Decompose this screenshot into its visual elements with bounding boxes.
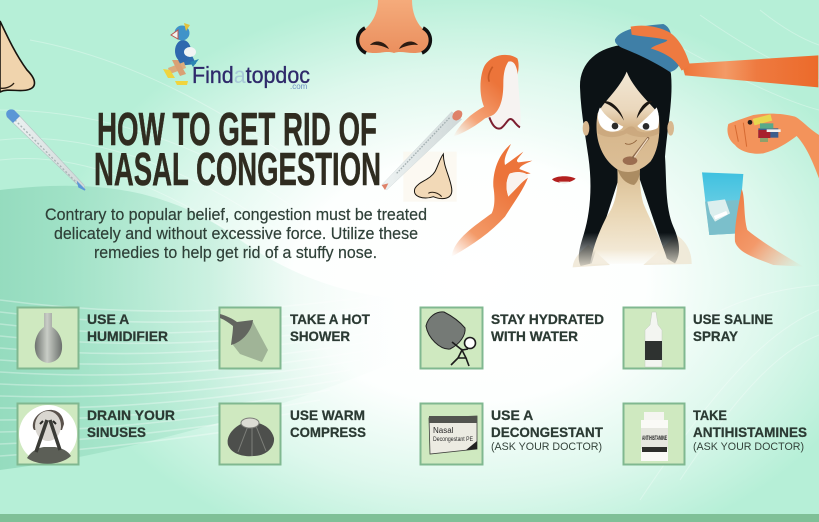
icon: saline bottle bbox=[645, 312, 662, 367]
logo wordmark: Findatopdoc bbox=[192, 62, 310, 88]
icon: duck mascot bbox=[163, 23, 199, 85]
icon: hand with pills bbox=[727, 114, 819, 178]
icon tile bbox=[220, 308, 280, 368]
label line two: WITH WATER bbox=[491, 328, 578, 344]
label: USE WARM bbox=[290, 407, 365, 423]
ears bbox=[583, 121, 589, 136]
remedy: use warm compress bbox=[220, 404, 366, 464]
logo .com: .com bbox=[290, 82, 308, 91]
remedy: use saline spray bbox=[624, 308, 773, 368]
icon: decongestant box: Decongestant PE bbox=[433, 436, 474, 443]
icon: decongestant box: Nasal bbox=[433, 426, 454, 435]
neck and chest bbox=[590, 168, 668, 264]
remedy: use a decongestant bbox=[420, 404, 603, 464]
label line two: DECONGESTANT bbox=[491, 424, 603, 440]
icon tile bbox=[18, 308, 78, 368]
icon: shower water bbox=[233, 322, 268, 362]
intro text: delicately and without excessive force. Utilize these bbox=[54, 224, 418, 243]
icon: carrying figure bbox=[451, 338, 476, 366]
nose line and mouth bbox=[625, 140, 637, 144]
intro text bbox=[45, 205, 427, 262]
label line two: SINUSES bbox=[87, 424, 146, 440]
label line two: COMPRESS bbox=[290, 424, 366, 440]
remedy: take a hot shower bbox=[220, 308, 370, 368]
icon: water jug bbox=[426, 312, 465, 349]
intro text: Contrary to popular belief, congestion must be treated bbox=[45, 205, 427, 224]
icon tile bbox=[624, 308, 684, 368]
icon: falling red drop bbox=[552, 176, 576, 184]
woman bbox=[573, 44, 692, 267]
icon: left side nose bbox=[0, 21, 34, 92]
label: USE A bbox=[491, 407, 533, 423]
icon: bottle label bbox=[645, 341, 662, 360]
icon tile bbox=[420, 404, 482, 464]
icon: ice pack with hand bbox=[615, 24, 818, 87]
remedy: use a humidifier bbox=[18, 308, 168, 368]
remedy: take antihistamines bbox=[624, 404, 807, 464]
label line two: SHOWER bbox=[290, 328, 350, 344]
icon: decongestant box bbox=[429, 416, 477, 454]
note: (ASK YOUR DOCTOR) bbox=[491, 441, 602, 453]
intro text: remedies to help get rid of a stuffy nose. bbox=[94, 243, 377, 262]
icon: antihistamine bottle: ANTIHISTAMINE bbox=[642, 436, 667, 442]
face bbox=[596, 72, 659, 172]
icon: hand pinching a drop bbox=[452, 144, 532, 257]
note: (ASK YOUR DOCTOR) bbox=[693, 441, 804, 453]
label line two: HUMIDIFIER bbox=[87, 328, 168, 344]
shoulders bbox=[573, 235, 692, 267]
label: DRAIN YOUR bbox=[87, 407, 175, 423]
label: STAY HYDRATED bbox=[491, 311, 604, 327]
label: TAKE A HOT bbox=[290, 311, 370, 327]
illustration group, drawn in 3x crop coordinates bbox=[382, 24, 819, 267]
icon tile bbox=[420, 308, 482, 368]
icon: glass of water with hand bbox=[702, 172, 803, 267]
eye shadows bbox=[597, 115, 659, 137]
brows bbox=[603, 101, 653, 121]
label: USE A bbox=[87, 311, 129, 327]
icon: hand holding tissue bbox=[453, 55, 521, 137]
label line two: SPRAY bbox=[693, 328, 739, 344]
icon: small nose with thermometer bbox=[382, 108, 464, 202]
hair bbox=[579, 44, 679, 266]
title bbox=[94, 103, 381, 195]
title: NASAL CONGESTION bbox=[94, 143, 381, 195]
icon: humidifier bbox=[35, 313, 62, 363]
icon: shower head bbox=[220, 314, 253, 345]
label line two: ANTIHISTAMINES bbox=[693, 424, 807, 440]
remedy: drain your sinuses bbox=[18, 404, 175, 464]
icon: compress bag bbox=[228, 423, 274, 456]
title: HOW TO GET RID OF bbox=[97, 103, 377, 155]
logo bbox=[163, 23, 310, 91]
icon tile bbox=[624, 404, 684, 464]
icon: antihistamine bottle bbox=[641, 412, 668, 461]
icon: left thermometer bbox=[6, 109, 85, 190]
eyes bbox=[598, 107, 623, 132]
icon tile bbox=[220, 404, 280, 464]
remedy: stay hydrated bbox=[420, 308, 604, 368]
label: USE SALINE bbox=[693, 311, 773, 327]
icon tile bbox=[18, 404, 78, 464]
icon: compress cap bbox=[241, 418, 259, 428]
mouth thermometer bbox=[633, 138, 648, 157]
icon: top centre nose bbox=[358, 0, 430, 53]
label: TAKE bbox=[693, 407, 727, 423]
icon: woman pressing sinuses bbox=[19, 405, 77, 464]
